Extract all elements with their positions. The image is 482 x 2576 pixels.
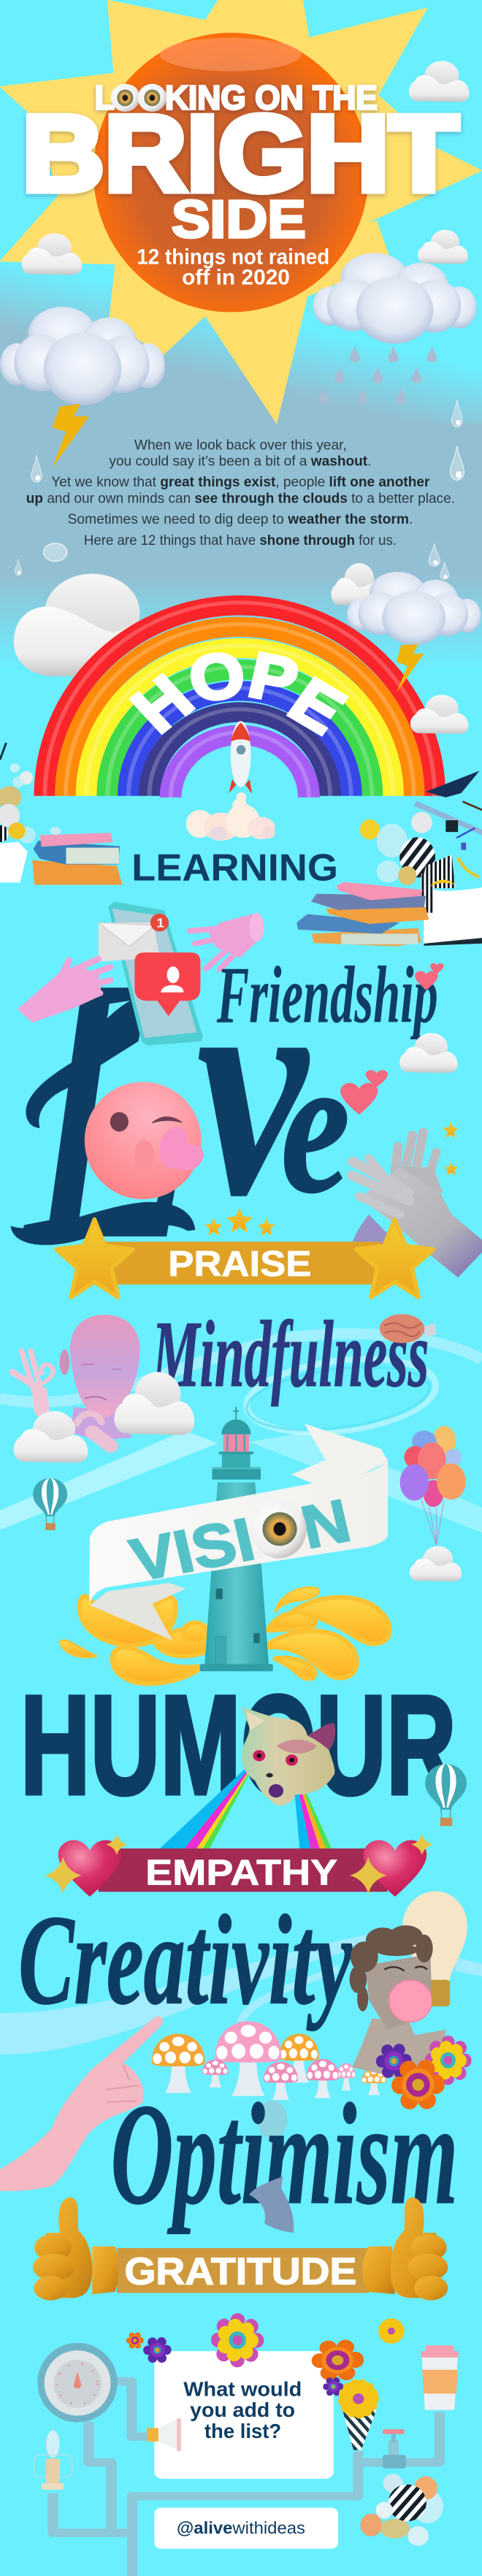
- lighthouse: [200, 1407, 273, 1671]
- humour, empathy, creativity section: [0, 1707, 482, 2235]
- icon: caged bulb: [34, 2431, 72, 2490]
- big white cloud: [14, 574, 148, 676]
- light beam right: [249, 1432, 482, 1532]
- phone: [108, 901, 203, 1046]
- intro text: Sometimes we need to dig deep to weather the storm.: [68, 512, 413, 527]
- cloud top right: [409, 61, 470, 102]
- lightning bolt: [53, 404, 89, 467]
- ok hand: [12, 1351, 53, 1410]
- intro text: When we look back over this year,: [134, 437, 347, 453]
- intro text: [26, 437, 455, 549]
- rain drops: [318, 345, 437, 405]
- icon: eyeballs in title: [111, 84, 167, 112]
- lightning bolt right: [397, 644, 424, 692]
- yellow splash: [60, 1587, 389, 1683]
- subtitle: off in 2020: [182, 265, 290, 289]
- small cloud right: [410, 695, 468, 734]
- water drop: [452, 400, 462, 427]
- paper flowers: [382, 2042, 465, 2103]
- intro text: you could say it’s been a bit of a washout.: [109, 454, 371, 469]
- ribbon: [89, 1423, 388, 1640]
- rainbow: [45, 603, 435, 798]
- cloud mid right: [418, 230, 468, 264]
- subtitle: 12 things not rained: [137, 245, 329, 269]
- icon: kissing emoji: [85, 1082, 204, 1199]
- large star right: [356, 1220, 433, 1297]
- love heading: e: [281, 1017, 350, 1234]
- pink hand right: [190, 913, 264, 969]
- intro text: Yet we know that great things exist, people lift one another: [51, 475, 430, 490]
- cloud below head: [14, 1411, 88, 1463]
- flowers top: [129, 2320, 401, 2360]
- chin hand: [77, 1413, 111, 1446]
- love heading: o: [124, 1060, 179, 1215]
- rainbow lasers: [160, 1756, 332, 1849]
- cloud left: [22, 234, 82, 275]
- storm cloud right: [347, 572, 481, 645]
- icon: coffee cup: [421, 2345, 459, 2410]
- envelope with badge: 1: [156, 915, 164, 930]
- swooshes: [0, 1932, 482, 2055]
- friendship and love section: [11, 874, 482, 1318]
- handle card: @alivewithideas: [177, 2518, 305, 2537]
- love heading: v: [197, 914, 310, 1261]
- learning right cluster: [360, 771, 482, 888]
- vision text: VISION: [125, 1487, 356, 1594]
- hearts near love: [340, 1070, 388, 1115]
- laser cat: [242, 1707, 335, 1805]
- praise banner: PRAISE: [168, 1243, 311, 1284]
- cloud: [399, 1033, 458, 1073]
- HOPE lettering: HOPE: [118, 638, 358, 747]
- icon: brain: [380, 1314, 437, 1343]
- title line 2: BRIGHT: [22, 93, 459, 213]
- pink hand left: [18, 959, 110, 1023]
- learning heading: LEARNING: [131, 846, 338, 889]
- mushrooms: [152, 2021, 386, 2100]
- hot air balloon: [33, 1478, 67, 1530]
- heart with sparkles left: [45, 1834, 128, 1897]
- learning left cluster: [0, 743, 61, 882]
- mindfulness and vision section: [0, 1302, 482, 1824]
- header section: [0, 0, 482, 467]
- empathy banner: EMPATHY: [145, 1852, 337, 1892]
- intro text: up and our own minds can see through the clouds to a better place.: [26, 491, 455, 506]
- sun rays: [0, 0, 482, 424]
- hot air balloon: [425, 1764, 467, 1826]
- rain cloud: [313, 253, 476, 344]
- large star left: [56, 1220, 133, 1297]
- handle card: [154, 2508, 338, 2549]
- icon: megaphone: [147, 2418, 181, 2451]
- love heading: L: [22, 900, 193, 1318]
- pipes: [53, 2381, 440, 2576]
- bubble gum: [389, 1980, 432, 2022]
- decorative spheres: [360, 2474, 443, 2546]
- intro and hope section: [0, 437, 482, 889]
- title line 3: SIDE: [172, 191, 306, 249]
- praise banner: [104, 1242, 381, 1285]
- left book stack: [32, 833, 123, 884]
- pointing hand: [0, 2017, 163, 2191]
- gauge: [37, 2343, 118, 2423]
- thumbs up left: [33, 2197, 118, 2301]
- storm cloud: [0, 307, 165, 405]
- david statue: [350, 1925, 445, 2079]
- hearts near friendship: [415, 963, 444, 990]
- title: [22, 80, 459, 289]
- light beam left: [0, 1431, 218, 1530]
- balloon cluster: [400, 1426, 466, 1545]
- title line 1: LOOKING ON THE: [95, 80, 378, 117]
- light bulb: [402, 1891, 467, 2006]
- empathy banner: [99, 1849, 387, 1892]
- cloud right of head: [114, 1372, 194, 1435]
- water drops around intro: [15, 446, 464, 579]
- question card: you add to: [190, 2399, 295, 2421]
- cloud under balloons: [410, 1546, 462, 1581]
- right book stack: [297, 874, 482, 947]
- heart with sparkles right: [350, 1834, 433, 1897]
- icon: eyeball: [251, 1499, 307, 1559]
- flower bouquet cone: [320, 2345, 377, 2450]
- icon: pipe valve: [383, 2429, 406, 2469]
- horse statue head: [249, 2176, 294, 2233]
- intro text: Here are 12 things that have shone through for us.: [84, 533, 397, 549]
- rocket smoke: [186, 792, 275, 841]
- envelope with badge: [99, 914, 169, 962]
- swoosh lines: [0, 1334, 482, 1442]
- question card: [154, 2351, 334, 2479]
- small white cloud behind storm: [331, 563, 383, 605]
- rocket: [229, 721, 252, 794]
- subtitle: [137, 245, 329, 289]
- blue balloon: [256, 2101, 288, 2178]
- sun disc: [93, 33, 369, 312]
- gratitude banner: GRATITUDE: [124, 2250, 356, 2293]
- head statue: [60, 1315, 140, 1440]
- love heading: [22, 900, 350, 1318]
- question card: What would: [183, 2378, 302, 2401]
- thumbs up right: [362, 2197, 448, 2301]
- gratitude and closing section: [33, 2176, 459, 2576]
- clapping hands: [351, 1132, 482, 1277]
- love flourishes: [11, 999, 195, 1245]
- small stars: [206, 1123, 458, 1235]
- question card: the list?: [204, 2420, 281, 2442]
- icon: notification bubble: [134, 952, 200, 1016]
